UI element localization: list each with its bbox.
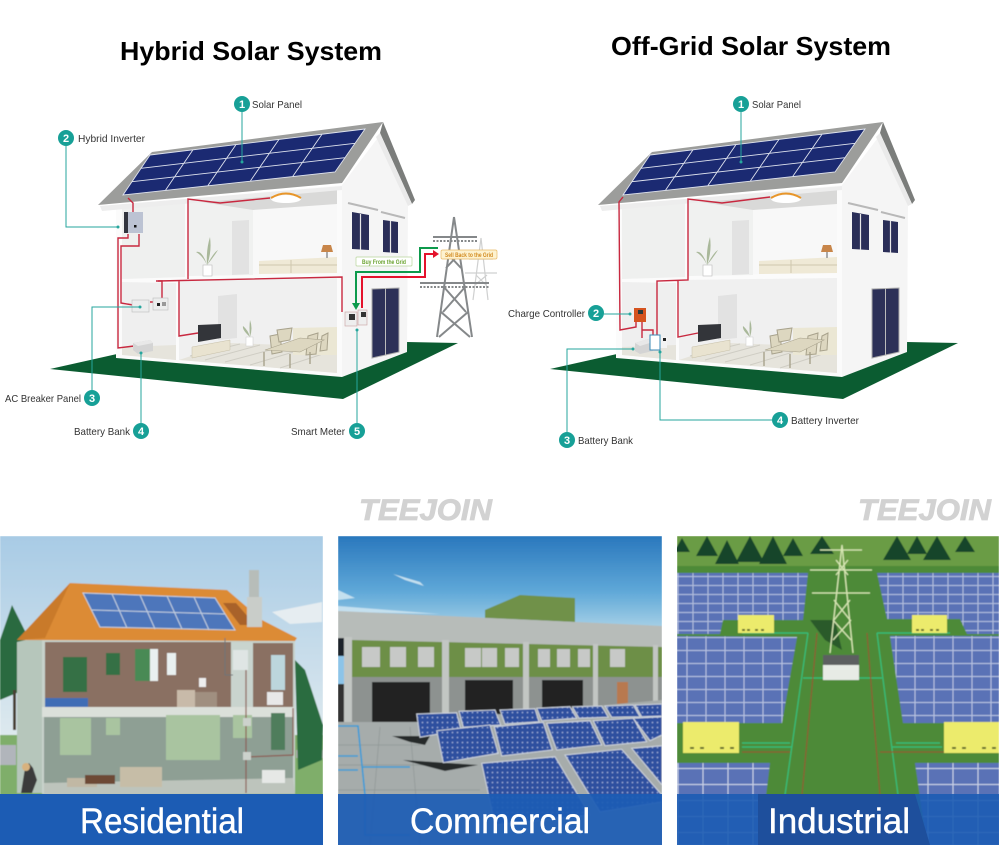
callout 2: hybrid inverter [58, 130, 145, 228]
house illustration: off-grid [550, 122, 958, 399]
callout 1: solar panel: 1 [239, 99, 245, 111]
callout 4: battery inverter: Battery Inverter [791, 415, 859, 427]
callout 3: AC breaker panel: 3 [89, 393, 95, 405]
icon: transmission tower [420, 217, 489, 337]
banner: Residential: Residential [80, 802, 244, 841]
panel: hybrid solar system diagram [5, 96, 497, 439]
callout 1: solar panel: 1 [738, 99, 744, 111]
arrow: sell back to the grid [362, 250, 439, 308]
icon: smart meters [345, 310, 367, 326]
banner: Commercial [338, 794, 662, 845]
callout 4: battery inverter: 4 [777, 415, 784, 427]
banner: Industrial [677, 794, 999, 845]
callout 4: battery bank [74, 352, 149, 439]
callout 4: battery bank: 4 [138, 426, 145, 438]
panel: industrial photo [674, 536, 999, 845]
callout 3: battery bank: Battery Bank [578, 435, 634, 447]
icon: charge controller [634, 308, 646, 322]
callout 3: AC breaker panel [5, 306, 142, 406]
arrow: buy from the grid [352, 248, 438, 310]
callout: buy from the grid [356, 257, 412, 266]
callout: sell back to the grid: Sell Back to the Grid [445, 253, 493, 259]
panel: commercial photo [338, 536, 662, 845]
callout 2: charge controller [508, 305, 632, 321]
solar farm scene [674, 536, 999, 845]
residential house scene [0, 536, 323, 795]
callout 1: solar panel [733, 96, 801, 164]
watermark: TEEJOIN right: TEEJOIN [858, 494, 992, 527]
callout 2: hybrid inverter: 2 [63, 133, 69, 145]
icon: battery inverter [650, 335, 667, 350]
watermark: TEEJOIN left: TEEJOIN [359, 494, 493, 527]
title: Hybrid Solar System: Hybrid Solar System [120, 36, 382, 66]
callout 2: hybrid inverter: Hybrid Inverter [78, 133, 145, 145]
callout 1: solar panel: Solar Panel [752, 99, 801, 111]
banner: Commercial: Commercial [410, 802, 590, 841]
callout 1: solar panel [234, 96, 302, 164]
icon: hybrid inverter [124, 212, 143, 233]
title: Off-Grid Solar System: Off-Grid Solar System [611, 31, 891, 61]
callout 5: smart meter: Smart Meter [291, 426, 345, 438]
callout 5: smart meter [291, 328, 365, 439]
house illustration: hybrid [50, 122, 458, 399]
icon: small background pylon [465, 238, 497, 300]
callout 3: battery bank: 3 [564, 435, 570, 447]
banner: Industrial: Industrial [768, 802, 910, 841]
wiring: off-grid [619, 197, 770, 338]
callout 1: solar panel: Solar Panel [252, 99, 302, 111]
wiring: hybrid [118, 198, 342, 348]
callout 5: smart meter: 5 [354, 426, 360, 438]
callout: buy from the grid: Buy From the Grid [362, 260, 406, 266]
callout 2: charge controller: 2 [593, 308, 599, 320]
callout 3: AC breaker panel: AC Breaker Panel [5, 393, 81, 405]
panel: residential photo [0, 536, 323, 845]
banner: Residential [0, 794, 323, 845]
commercial building scene [338, 536, 662, 845]
callout 4: battery inverter [658, 350, 859, 428]
callout 4: battery bank: Battery Bank [74, 426, 131, 438]
icon: battery bank [133, 340, 153, 354]
panel: off-grid solar system diagram [508, 96, 958, 448]
callout: sell back to the grid [441, 250, 497, 259]
icon: battery bank [635, 339, 653, 354]
callout 3: battery bank [559, 348, 634, 448]
icon: AC breaker panel [132, 298, 168, 312]
callout 2: charge controller: Charge Controller [508, 308, 585, 320]
